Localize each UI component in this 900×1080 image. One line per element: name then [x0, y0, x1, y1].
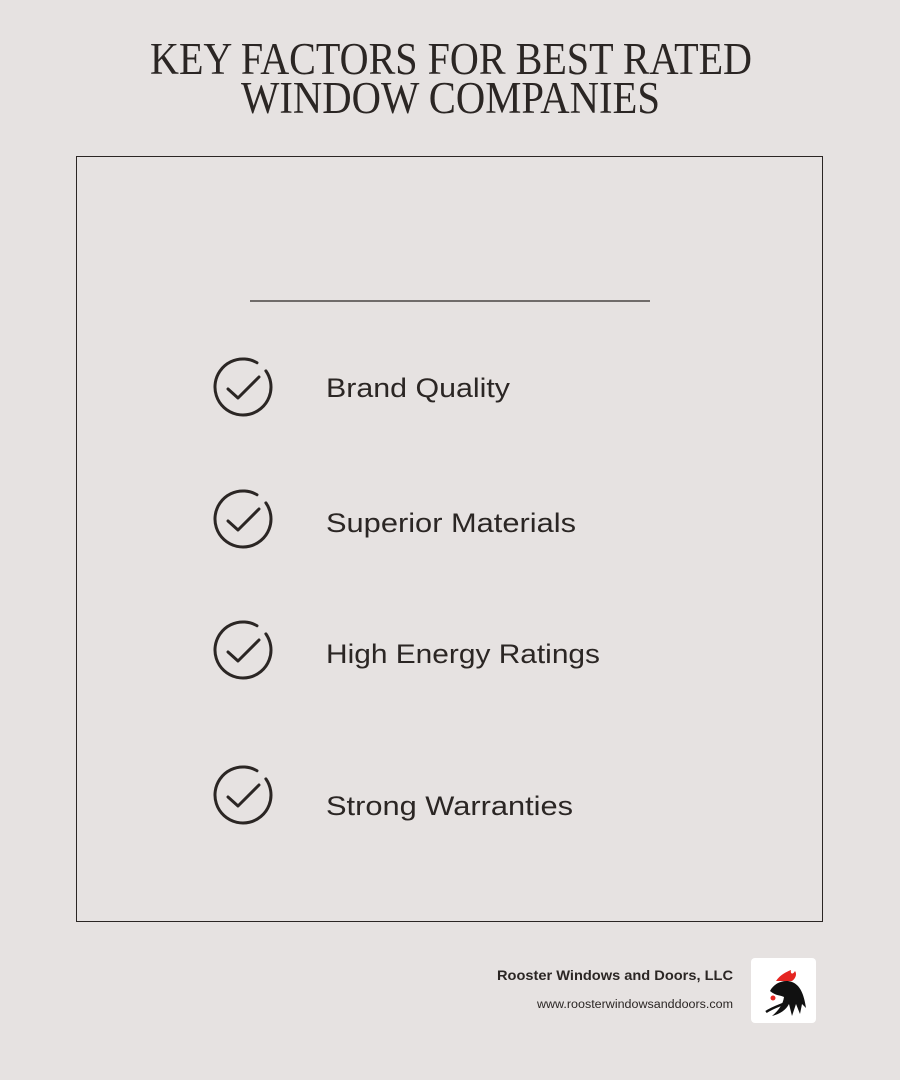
item: High Energy Ratings: High Energy Ratings [326, 639, 600, 669]
item: Strong Warranties [215, 767, 573, 823]
item: Superior Materials [215, 491, 576, 547]
footer: Rooster Windows and Doors, LLC [497, 967, 733, 983]
panel: factors [76, 156, 822, 922]
item: Strong Warranties: Strong Warranties [326, 791, 573, 821]
item: Brand Quality [215, 359, 511, 415]
footer: www.roosterwindowsanddoors.com [536, 999, 733, 1011]
title [150, 34, 752, 123]
icon: rooster logo [751, 958, 816, 1023]
title: WINDOW COMPANIES [241, 73, 660, 123]
footer [497, 958, 816, 1023]
title: KEY FACTORS FOR BEST RATED [150, 34, 752, 84]
item: Brand Quality: Brand Quality [326, 373, 511, 403]
item: High Energy Ratings [215, 622, 600, 678]
item: Superior Materials: Superior Materials [326, 508, 576, 538]
